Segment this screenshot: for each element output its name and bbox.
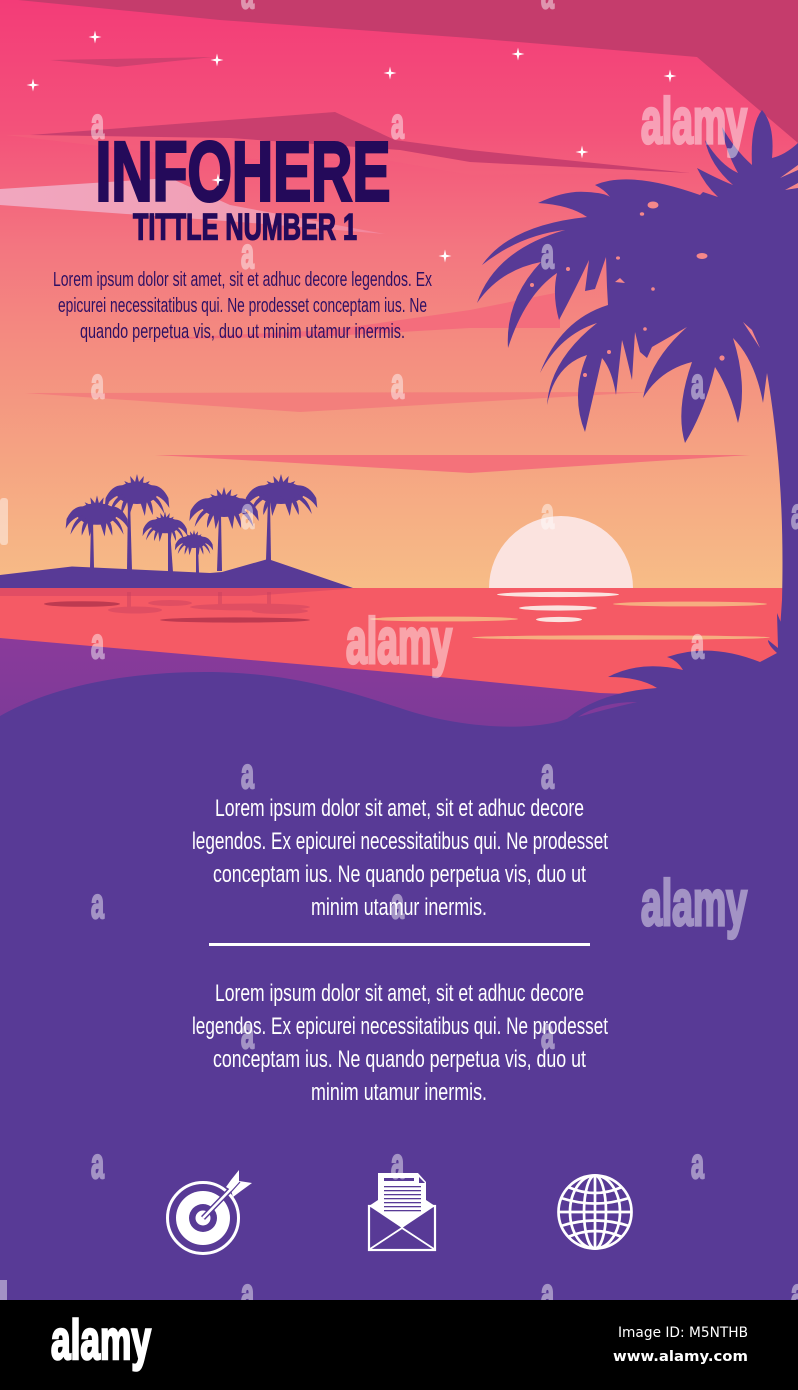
watermarks: a [391,360,405,408]
foreground purple shore [0,638,798,740]
watermarks: a [241,490,255,538]
text block 1: minim utamur inermis. [311,894,487,921]
watermarks: a [391,100,405,148]
divider [209,943,590,946]
text block 1: conceptam ius. Ne quando perpetua vis, duo ut [213,861,586,888]
text block 2: conceptam ius. Ne quando perpetua vis, duo ut [213,1046,586,1073]
watermarks: a [541,230,555,278]
icon: target with arrow [168,1170,252,1254]
text block 2: minim utamur inermis. [311,1079,487,1106]
watermarks: a [241,750,255,798]
footer bar [0,1300,798,1390]
watermarks: a [691,1140,705,1188]
stars [26,30,676,262]
icon: globe [558,1175,632,1249]
intro text block: Lorem ipsum dolor sit amet, sit et adhuc decore legendos. Ex [53,268,433,291]
watermarks: a [541,1270,555,1318]
text block 1 [192,795,608,921]
watermarks: a [91,360,105,408]
intro text block [53,268,433,343]
footer image id: Image ID: M5NTHB [618,1325,748,1341]
icon: envelope with document [369,1173,435,1250]
intro text block: epicurei necessitatibus qui. Ne prodesset conceptam ius. Ne [58,294,427,317]
lower purple panel with hill [0,672,798,1300]
watermarks: a [541,750,555,798]
watermarks: a [391,880,405,928]
watermarks: a [91,620,105,668]
text block 1: legendos. Ex epicurei necessitatibus qui. Ne prodesset [192,828,608,855]
watermarks: a [541,490,555,538]
watermarks: a [91,880,105,928]
star over title [212,174,224,186]
text block 2: legendos. Ex epicurei necessitatibus qui. Ne prodesset [192,1013,608,1040]
clouds [0,0,798,473]
subtitle: TITTLE NUMBER 1 [133,206,357,248]
watermarks: a [241,1010,255,1058]
watermarks: a [91,100,105,148]
title: INFOHERE [96,124,390,218]
sun [489,516,633,588]
text block 2: Lorem ipsum dolor sit amet, sit et adhuc decore [215,980,584,1007]
big palm tree silhouette [477,110,798,660]
text block 1: Lorem ipsum dolor sit amet, sit et adhuc decore [215,795,584,822]
island with palm trees [0,474,353,588]
sea [0,588,798,703]
footer url: www.alamy.com [613,1349,748,1365]
watermarks: a [91,1140,105,1188]
watermarks: a [241,1270,255,1318]
bush leaves at shore [560,613,798,730]
sky background [0,0,798,590]
watermarks: a [691,620,705,668]
watermarks: a [541,1010,555,1058]
watermarks: a [691,360,705,408]
watermarks: a [391,1140,405,1188]
intro text block: quando perpetua vis, duo ut minim utamur inermis. [80,320,405,343]
watermarks: alamy [346,605,452,677]
footer logo: alamy [51,1308,151,1371]
text block 2 [192,980,608,1106]
watermarks: a [241,230,255,278]
